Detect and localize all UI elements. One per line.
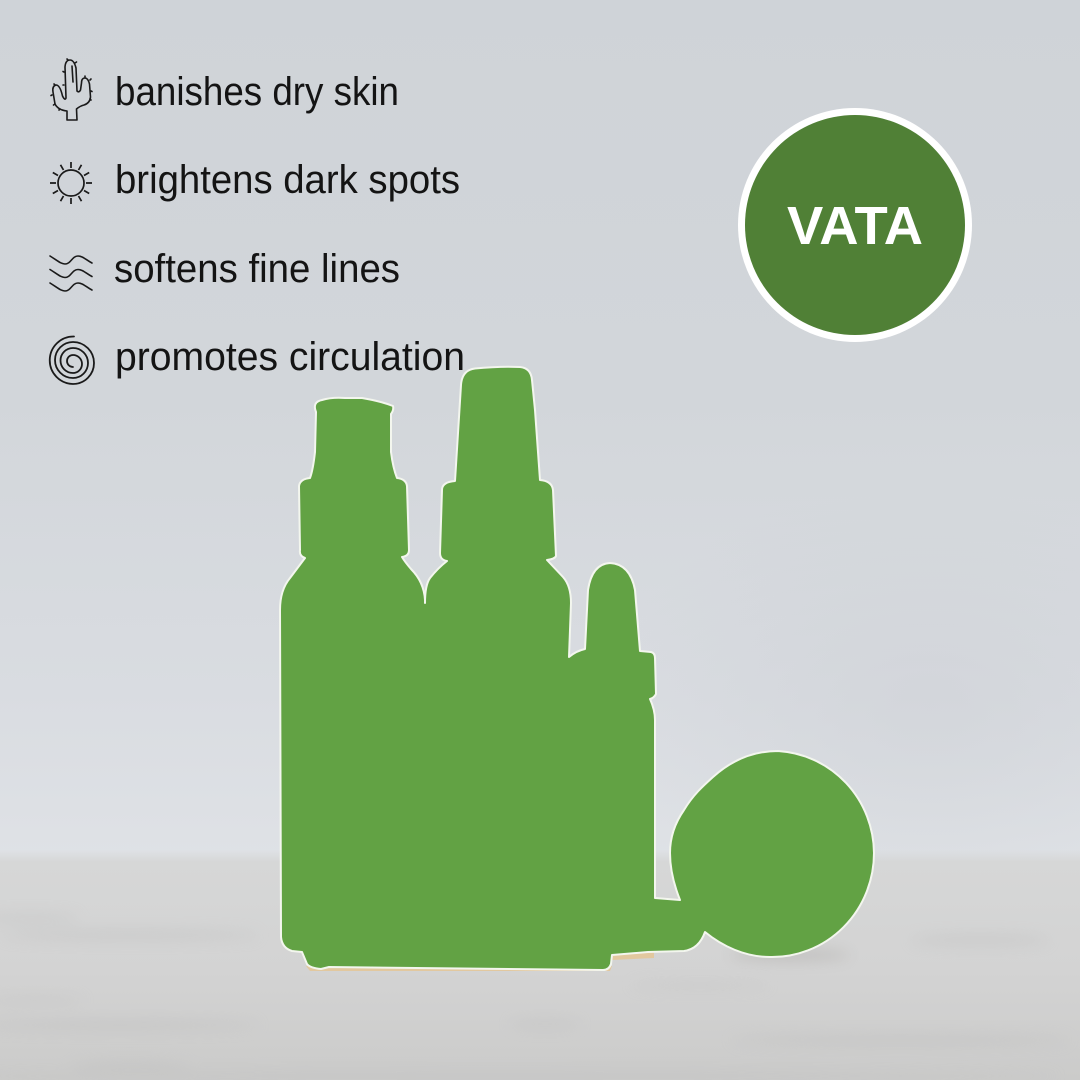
badge label: VATA [787,196,923,256]
silhouette: green bottles and round jar [280,367,874,970]
icon: sun [50,162,92,204]
text: banishes dry skin: banishes dry skin [115,70,399,114]
badge: VATA [738,108,972,342]
icon: waves [50,256,92,291]
product peek-through under silhouette [306,950,654,971]
icon: cactus [51,59,92,120]
text: brightens dark spots: brightens dark spots [115,158,460,202]
text: promotes circulation: promotes circulation [115,335,465,379]
background: marble table [0,850,1080,1080]
text: softens fine lines: softens fine lines [114,247,400,291]
icon: spiral [50,336,94,384]
list: skin benefits [50,59,465,384]
